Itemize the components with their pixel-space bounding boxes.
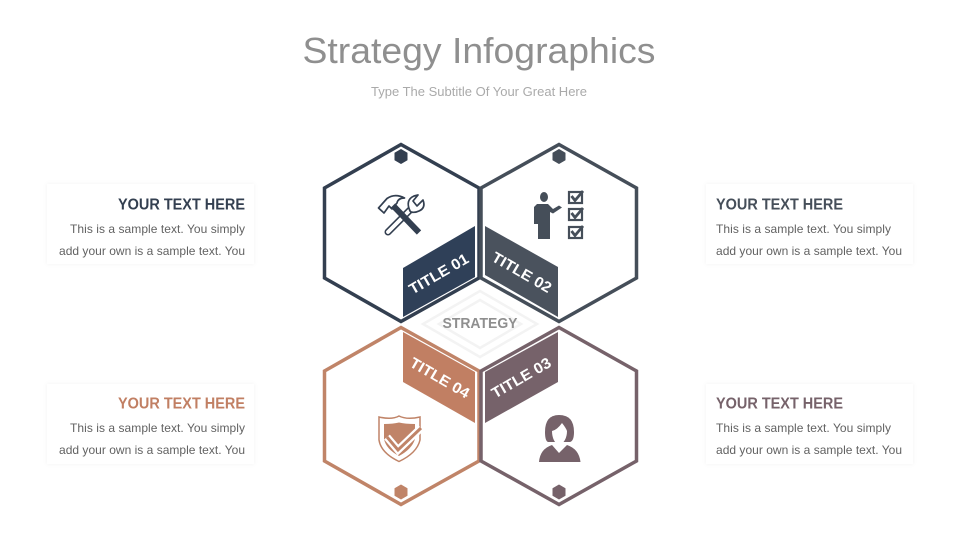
title tab 03: TITLE 03 [489,355,554,402]
panel: text card 2 [706,184,913,264]
hexagon 2 [324,144,636,504]
card 3 body: This is a sample text. You simply [716,421,891,435]
title tab 01 [403,226,475,317]
icon: woman portrait [539,415,580,462]
card 2 body: add your own is a sample text. You [716,244,902,258]
center label: STRATEGY [442,316,518,332]
title tab 02 [485,226,558,317]
title tab 02: TITLE 02 [489,249,554,297]
card 2 heading: YOUR TEXT HERE [716,196,843,214]
card 3 heading: YOUR TEXT HERE [716,396,843,412]
title tab 03 [485,332,558,423]
card 1 body: add your own is a sample text. You [59,244,245,258]
card 3 body: add your own is a sample text. You [716,443,902,457]
subtitle: Type The Subtitle Of Your Great Here [371,84,587,99]
card 4 heading: YOUR TEXT HERE [118,396,245,412]
icon: hammer and wrench [378,195,424,232]
card 4 body: add your own is a sample text. You [59,443,245,457]
panel: text card 4 [47,384,254,464]
hexagon 4 dot [395,485,407,499]
panel: text card 1 [47,184,254,264]
card 2 body: This is a sample text. You simply [716,222,891,236]
card 2 body [716,222,902,258]
card 4 body: This is a sample text. You simply [70,421,245,435]
card 4 body [59,421,245,457]
icon: presenter with checklist [534,191,583,239]
icon: shield with check [379,416,421,462]
hexagon 4 [324,328,636,504]
hexagon 3 dot [553,485,565,499]
hexagon 2 dot [553,150,565,164]
card 1 heading: YOUR TEXT HERE [118,196,245,214]
hexagon 1 dot [395,150,407,164]
center diamond: strategy [423,291,537,357]
card 1 body [59,222,245,258]
hexagon 1 [324,144,636,504]
card 3 body [716,421,902,457]
card 1 body: This is a sample text. You simply [70,222,245,236]
title tab 04: TITLE 04 [407,355,473,403]
panel: text card 3 [706,384,913,464]
title tab 04 [403,332,475,423]
hexagon 3 [481,328,636,504]
title tab 01: TITLE 01 [406,251,472,298]
title: Strategy Infographics [302,30,656,71]
